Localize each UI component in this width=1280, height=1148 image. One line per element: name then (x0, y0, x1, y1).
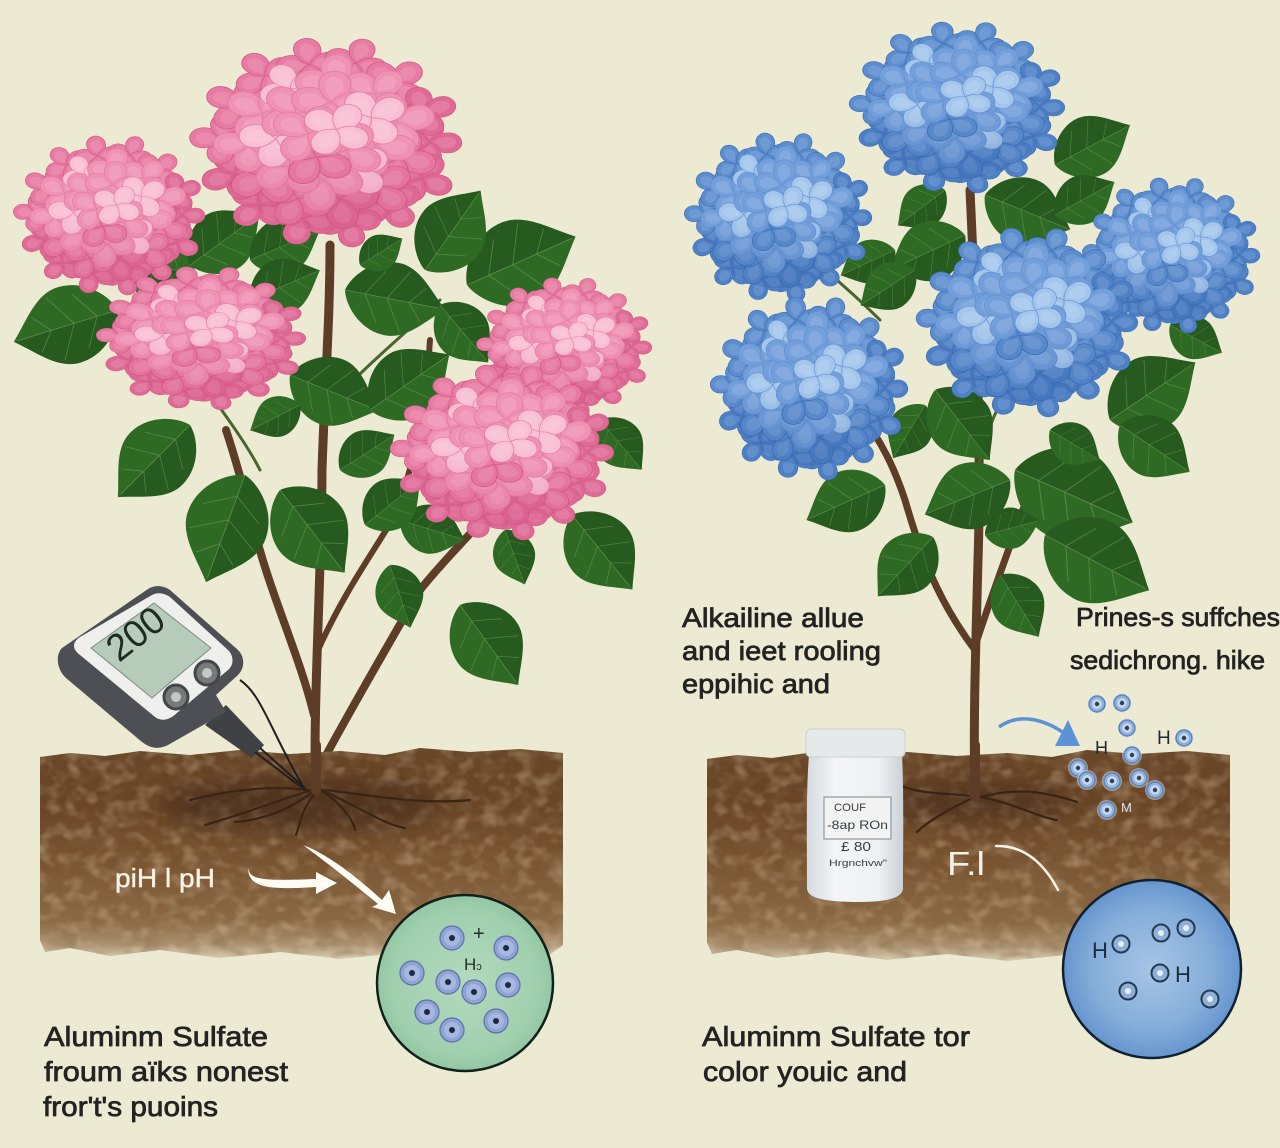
meter bezel (74, 593, 232, 720)
text: bottom right caption: Aluminm Sulfate tor (702, 1021, 970, 1052)
flower head: top (848, 17, 1068, 197)
stems (815, 190, 1030, 795)
panel: blue hydrangea plant (684, 17, 1263, 795)
panel: right soil (707, 747, 1232, 967)
ion labels (1095, 728, 1171, 815)
ions rising from right soil (1068, 693, 1194, 820)
text: bottom left caption: froum aïks nonest (44, 1056, 288, 1087)
text: middle left caption: Alkailine allue (682, 603, 864, 633)
arrow: curved white (248, 868, 337, 894)
meter screen (91, 603, 211, 698)
label: pH: piH l pH (115, 863, 215, 893)
arrow: diagonal white (303, 845, 396, 914)
flower head: lower right (389, 360, 618, 544)
ion labels (1092, 938, 1191, 987)
flower head: top (189, 32, 466, 252)
jar lid (806, 729, 905, 757)
jar label text: £ 80 (841, 839, 871, 854)
meter probe (205, 705, 264, 758)
icon: pH meter (58, 586, 305, 790)
text: bottom left caption: fror't's puoins (43, 1091, 218, 1122)
flower head: centre (915, 223, 1142, 421)
leaves (2, 170, 660, 706)
formula label: Hɔ (464, 955, 482, 974)
ion labels: H (1092, 938, 1108, 963)
jar label text: COUF (834, 802, 866, 814)
roots (892, 782, 1077, 832)
jar label text: -8ap ROn (827, 818, 888, 832)
ion labels: H (1095, 738, 1108, 758)
icon: fertilizer jar (806, 729, 905, 902)
meter wires (240, 680, 305, 790)
flower head: left (684, 128, 875, 306)
text: middle right caption: Prines-s suffches (1076, 602, 1280, 632)
panel: green ion circle (377, 895, 553, 1071)
flower head: middle left (95, 263, 309, 413)
text: middle left caption (682, 603, 881, 699)
jar label text (827, 802, 888, 868)
ions (400, 926, 520, 1042)
meter body (58, 586, 243, 748)
leaves (794, 98, 1232, 651)
panel: pink hydrangea plant (2, 32, 660, 790)
text: bottom left caption: Aluminm Sulfate (44, 1021, 268, 1052)
flower head: left (13, 131, 208, 299)
meter reading: 200 (99, 599, 173, 670)
flower head: right (1082, 174, 1263, 337)
label: F.l: F.l (947, 845, 985, 882)
ions (1112, 920, 1218, 1008)
text: middle left caption: eppihic and (682, 669, 830, 699)
ion labels: H (1175, 962, 1191, 987)
arrow: thin white curve (996, 846, 1058, 890)
ion labels: H (1157, 728, 1171, 749)
flower head: lower left (710, 292, 911, 484)
panel: left soil (40, 745, 565, 965)
flower head: right (476, 274, 655, 420)
text: bottom left caption (43, 1021, 288, 1122)
roots (190, 788, 470, 835)
jar body (807, 755, 903, 902)
jar label box (824, 797, 891, 839)
text: middle left caption: and ieet rooling (682, 636, 881, 666)
jar label text: Hrgnchvw" (829, 858, 887, 868)
text: bottom right caption (702, 1021, 970, 1087)
text: middle right caption: sedichrong. hike (1070, 645, 1265, 675)
panel: blue ion circle (1063, 880, 1241, 1058)
text: bottom right caption: color youic and (703, 1056, 907, 1087)
trunk bases over soil (316, 745, 975, 797)
text: middle right caption (1070, 602, 1280, 675)
plus sign: + (473, 923, 485, 945)
arrow: blue curved (999, 719, 1080, 746)
ion labels: M (1121, 800, 1132, 815)
stems (130, 245, 478, 790)
meter buttons (164, 661, 219, 709)
